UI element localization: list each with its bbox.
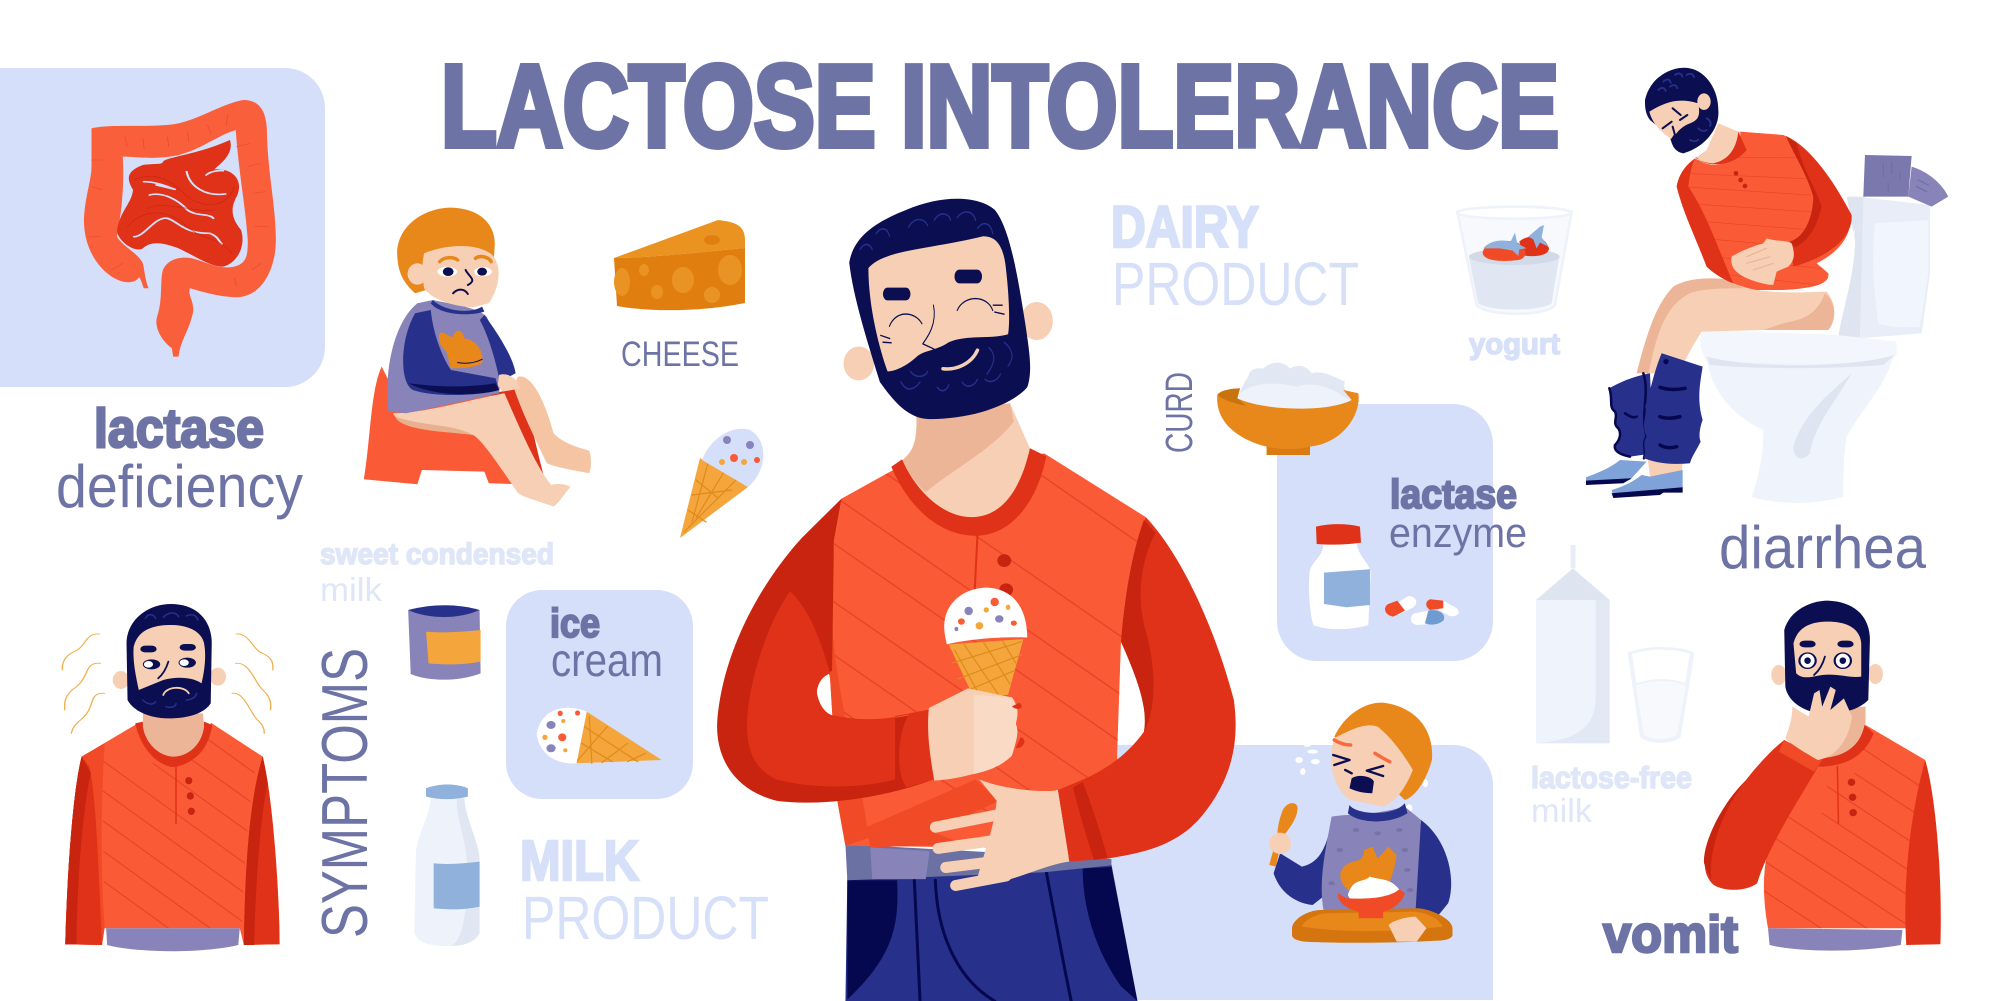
strawberries	[1483, 225, 1549, 261]
hand over mouth	[1785, 687, 1852, 760]
small intestine	[117, 140, 243, 267]
right arm	[1058, 517, 1236, 862]
eyebrows	[883, 288, 910, 300]
potty	[364, 367, 545, 485]
collar	[431, 300, 484, 314]
eyes, nose and smile	[881, 299, 1004, 349]
thigh	[1637, 278, 1834, 373]
features	[1333, 740, 1390, 793]
icon: ice cream cone sideways	[537, 708, 662, 763]
sprinkles	[954, 598, 1017, 631]
dog toy	[439, 331, 483, 368]
face features	[1663, 108, 1692, 140]
hair and beard	[849, 199, 1030, 419]
label: dairy product: PRODUCT	[1112, 250, 1359, 318]
shoes	[1586, 460, 1647, 484]
panel: lactase deficiency	[0, 68, 325, 387]
belt	[845, 844, 1111, 880]
large intestine	[84, 100, 276, 357]
stripes	[102, 739, 255, 928]
panel: lactase enzyme	[1277, 404, 1493, 661]
toilet tank	[1838, 197, 1865, 338]
head hair	[1645, 68, 1718, 153]
face	[133, 625, 205, 690]
hand	[498, 374, 520, 392]
panel: crying child	[1100, 745, 1493, 1000]
cuff left	[899, 710, 934, 787]
label: yogurt: yogurt	[1469, 328, 1560, 361]
sweater dots	[1328, 828, 1413, 892]
features	[140, 613, 198, 707]
torso side	[801, 499, 868, 846]
label: ice cream	[550, 600, 663, 686]
hair curls	[860, 212, 1012, 391]
left arm	[717, 499, 933, 803]
figure: crying child with curd	[1269, 703, 1452, 943]
label: sweet condensed milk: milk	[320, 571, 383, 608]
toilet lid	[1827, 230, 1855, 335]
arm	[403, 310, 499, 395]
head hair	[1334, 703, 1432, 800]
neck	[1697, 123, 1741, 165]
torso	[1677, 132, 1850, 290]
ice cream scoop	[944, 588, 1027, 644]
front leg	[393, 393, 570, 507]
label: lactose-free milk: milk	[1531, 792, 1593, 829]
collar	[135, 722, 212, 767]
icon: condensed milk can	[408, 605, 481, 680]
head	[1784, 601, 1870, 713]
figure: man with dizziness	[62, 604, 280, 983]
tray hand	[1389, 917, 1426, 942]
dropped trousers	[1609, 373, 1653, 457]
shirt stripes	[1688, 157, 1823, 286]
torso stripes	[832, 474, 1137, 812]
face	[1331, 725, 1413, 807]
icon: yogurt glass	[1457, 207, 1572, 314]
lower torso shadow	[866, 779, 999, 847]
ear	[408, 263, 427, 285]
label: lactase enzyme	[1389, 471, 1527, 556]
label: symptoms: SYMPTOMS	[308, 648, 381, 938]
label: vomit: vomit	[1603, 906, 1738, 964]
label: lactase deficiency: lactase	[94, 397, 264, 459]
tray	[1292, 908, 1452, 943]
icon: small ice cream cone	[680, 429, 763, 538]
label: lactose-free milk: lactose-free	[1531, 760, 1692, 795]
hair and beard	[127, 604, 212, 718]
torso	[830, 454, 1146, 848]
shirt buttons	[1734, 171, 1738, 176]
stripes	[1764, 749, 1919, 928]
ears	[113, 671, 129, 689]
label: milk product	[520, 829, 769, 952]
label: ice cream: cream	[551, 634, 663, 686]
toilet seat	[1700, 330, 1897, 365]
placket and buttons	[175, 767, 177, 823]
back leg	[513, 376, 591, 473]
neck	[902, 403, 1030, 519]
sleeves	[65, 743, 105, 945]
label: dairy product	[1111, 195, 1359, 318]
arms	[1274, 822, 1332, 905]
label: cheese: CHEESE	[621, 335, 739, 374]
face	[422, 246, 499, 307]
neck	[143, 713, 204, 757]
placket and buttons	[1837, 767, 1838, 823]
squirrel	[1340, 847, 1397, 893]
label: lactase deficiency	[56, 397, 303, 520]
spoon	[1269, 803, 1298, 867]
hand holding cone	[928, 688, 1017, 781]
figure: sad boy on potty	[364, 208, 591, 507]
hand on belly	[1731, 238, 1794, 285]
icon: pill bottle and capsules	[1309, 524, 1459, 629]
label: ice cream: ice	[550, 600, 600, 646]
neck and collar	[1790, 707, 1866, 760]
label: lactose-free milk	[1531, 760, 1692, 829]
torso	[1764, 725, 1925, 928]
icon: milk bottle	[414, 785, 480, 946]
sweater	[65, 723, 280, 945]
label: milk product: PRODUCT	[522, 884, 769, 952]
capsules	[1385, 596, 1459, 625]
hair curls	[1658, 73, 1711, 141]
label: curd: CURD	[1159, 372, 1201, 453]
fist	[1269, 833, 1291, 854]
collar	[891, 448, 1046, 536]
panel: ice cream	[506, 590, 693, 799]
raised arm	[1705, 740, 1822, 890]
ears	[1771, 665, 1786, 685]
jeans on tank	[1863, 155, 1912, 197]
ear	[1697, 93, 1711, 110]
sweater	[1322, 807, 1421, 910]
icon: curd bowl	[1217, 363, 1359, 455]
shirt	[387, 300, 500, 413]
label: lactase enzyme: lactase	[1390, 471, 1517, 517]
tears	[1295, 743, 1428, 812]
label: dairy product: DAIRY	[1111, 195, 1259, 260]
resting hand	[935, 779, 1069, 885]
belt	[106, 928, 240, 951]
belt	[1768, 928, 1902, 951]
title: LACTOSE INTOLERANCE	[441, 41, 1559, 171]
icon: milk glass	[1630, 648, 1692, 742]
toilet bowl	[1707, 357, 1893, 503]
label: diarrhea: diarrhea	[1719, 514, 1927, 581]
placket and buttons	[975, 536, 977, 589]
face	[1649, 101, 1699, 140]
shirt shadow	[1677, 158, 1733, 283]
label: milk product: MILK	[520, 829, 639, 893]
ears	[844, 346, 874, 380]
ice cream cone	[949, 639, 1023, 697]
pants	[845, 864, 1137, 1001]
figure: man on toilet	[1586, 68, 1948, 503]
arm	[1786, 136, 1852, 267]
wavy dizziness lines	[62, 634, 273, 733]
face	[868, 236, 1009, 371]
icon: cheese	[614, 220, 745, 310]
features	[1799, 641, 1854, 675]
label: lactase deficiency: deficiency	[56, 453, 303, 520]
label: lactase enzyme: enzyme	[1389, 509, 1527, 556]
label: sweet condensed milk	[320, 538, 554, 608]
figure: main man eating ice cream	[717, 199, 1236, 1001]
label: sweet condensed milk: sweet condensed	[320, 538, 554, 571]
bowl of curd	[1348, 877, 1402, 900]
icon: intestines	[84, 100, 276, 357]
right sleeve	[1905, 760, 1941, 945]
icon: milk carton	[1536, 545, 1610, 743]
facial features	[437, 257, 492, 294]
hair	[397, 208, 495, 293]
figure: man with nausea (vomit)	[1704, 600, 1941, 951]
face	[1793, 622, 1861, 677]
lower leg	[1647, 450, 1683, 477]
